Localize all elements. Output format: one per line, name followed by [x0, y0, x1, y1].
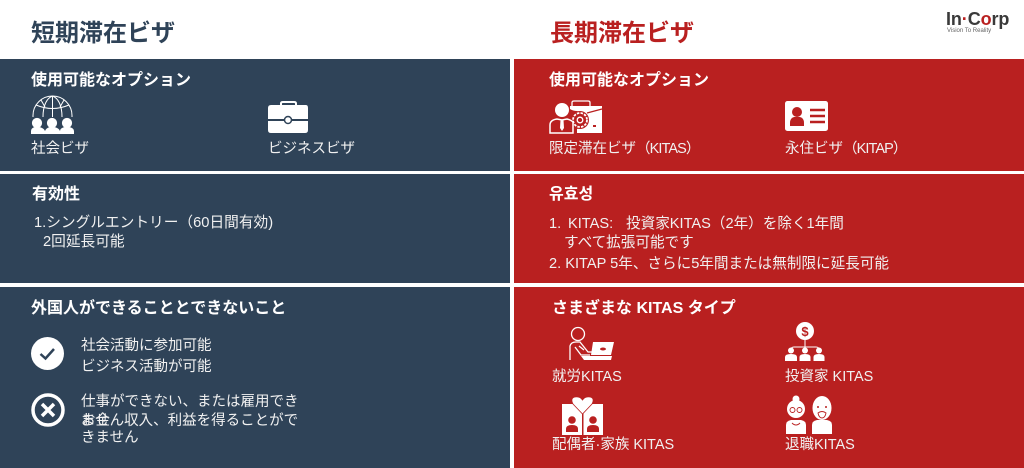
- text: allowed activities: [81, 337, 212, 375]
- label: permanent residence visa: 永住ビザ（KITAP）: [785, 141, 907, 157]
- heading: can and cannot: 外国人ができることとできないこと: [31, 300, 286, 317]
- text: validity details: 2回延長可能: [43, 234, 125, 250]
- logo: InCorp: In·Corp: [946, 9, 1009, 29]
- text: validity details: 1.シングルエントリー（60日間有効): [34, 215, 273, 231]
- text: allowed activities: 社会活動に参加可能: [81, 338, 212, 354]
- heading: validity: 有効性: [32, 186, 80, 203]
- logo: InCorp: Vision To Reality: [947, 28, 991, 34]
- heading: validity: 유효성: [549, 186, 593, 203]
- label: spouse and family KITAS: 配偶者·家族 KITAS: [552, 437, 674, 453]
- panel: long-stay validity: [514, 174, 1024, 283]
- text: prohibited activities: [81, 393, 298, 446]
- label: work KITAS: 就労KITAS: [552, 369, 622, 385]
- text: validity details: 1.: [549, 216, 561, 232]
- title: long-stay visa: 長期滞在ビザ: [550, 20, 694, 47]
- text: validity details: すべて拡張可能です: [564, 235, 694, 251]
- heading: options: 使用可能なオプション: [549, 72, 709, 89]
- panel: long-stay options: [514, 59, 1024, 171]
- icon: worker with laptop: [569, 326, 614, 360]
- label: limited stay visa: 限定滞在ビザ（KITAS）: [549, 141, 700, 157]
- text: prohibited activities: ません収入、利益を得ることがで: [81, 413, 298, 429]
- text: validity details: KITAS:: [568, 216, 613, 232]
- heading: options: 使用可能なオプション: [31, 72, 191, 89]
- text: validity details: 投資家KITAS（2年）を除く1年間: [626, 216, 844, 232]
- label: investor KITAS: 投資家 KITAS: [785, 369, 873, 385]
- icon: check: [31, 337, 64, 370]
- text: validity details: 2. KITAP 5年、さらに5年間または無制限に延長可能: [549, 256, 889, 272]
- text: validity details: [549, 215, 889, 272]
- panel: short-stay validity: [0, 174, 510, 283]
- label: retirement KITAS: 退職KITAS: [785, 437, 855, 453]
- panel: short-stay options: [0, 59, 510, 171]
- icon: globe and people: [31, 96, 74, 134]
- panel: KITAS types: [514, 287, 1024, 468]
- label: business visa: ビジネスビザ: [268, 141, 355, 157]
- icon: briefcase: [268, 101, 308, 133]
- icon: ID card: [785, 101, 828, 131]
- text: prohibited activities: 仕事ができない、または雇用でき: [81, 394, 298, 410]
- text: prohibited activities: お金: [81, 413, 110, 429]
- heading: KITAS types: さまざまな KITAS タイプ: [552, 300, 736, 317]
- icon: person with gear and briefcase: [549, 100, 602, 134]
- text: allowed activities: ビジネス活動が可能: [81, 359, 212, 375]
- title: short-stay visa: 短期滞在ビザ: [31, 20, 175, 47]
- text: validity details: [34, 214, 273, 250]
- icon: spouse and family: [562, 397, 603, 435]
- icon: investor: [785, 322, 824, 361]
- icon: elderly couple: [786, 396, 832, 434]
- label: social visa: 社会ビザ: [31, 141, 89, 157]
- panel: what foreigners can and cannot do: [0, 287, 510, 468]
- icon: investor: $: [801, 324, 809, 339]
- icon: cross: [31, 393, 65, 427]
- text: prohibited activities: きません: [81, 430, 139, 446]
